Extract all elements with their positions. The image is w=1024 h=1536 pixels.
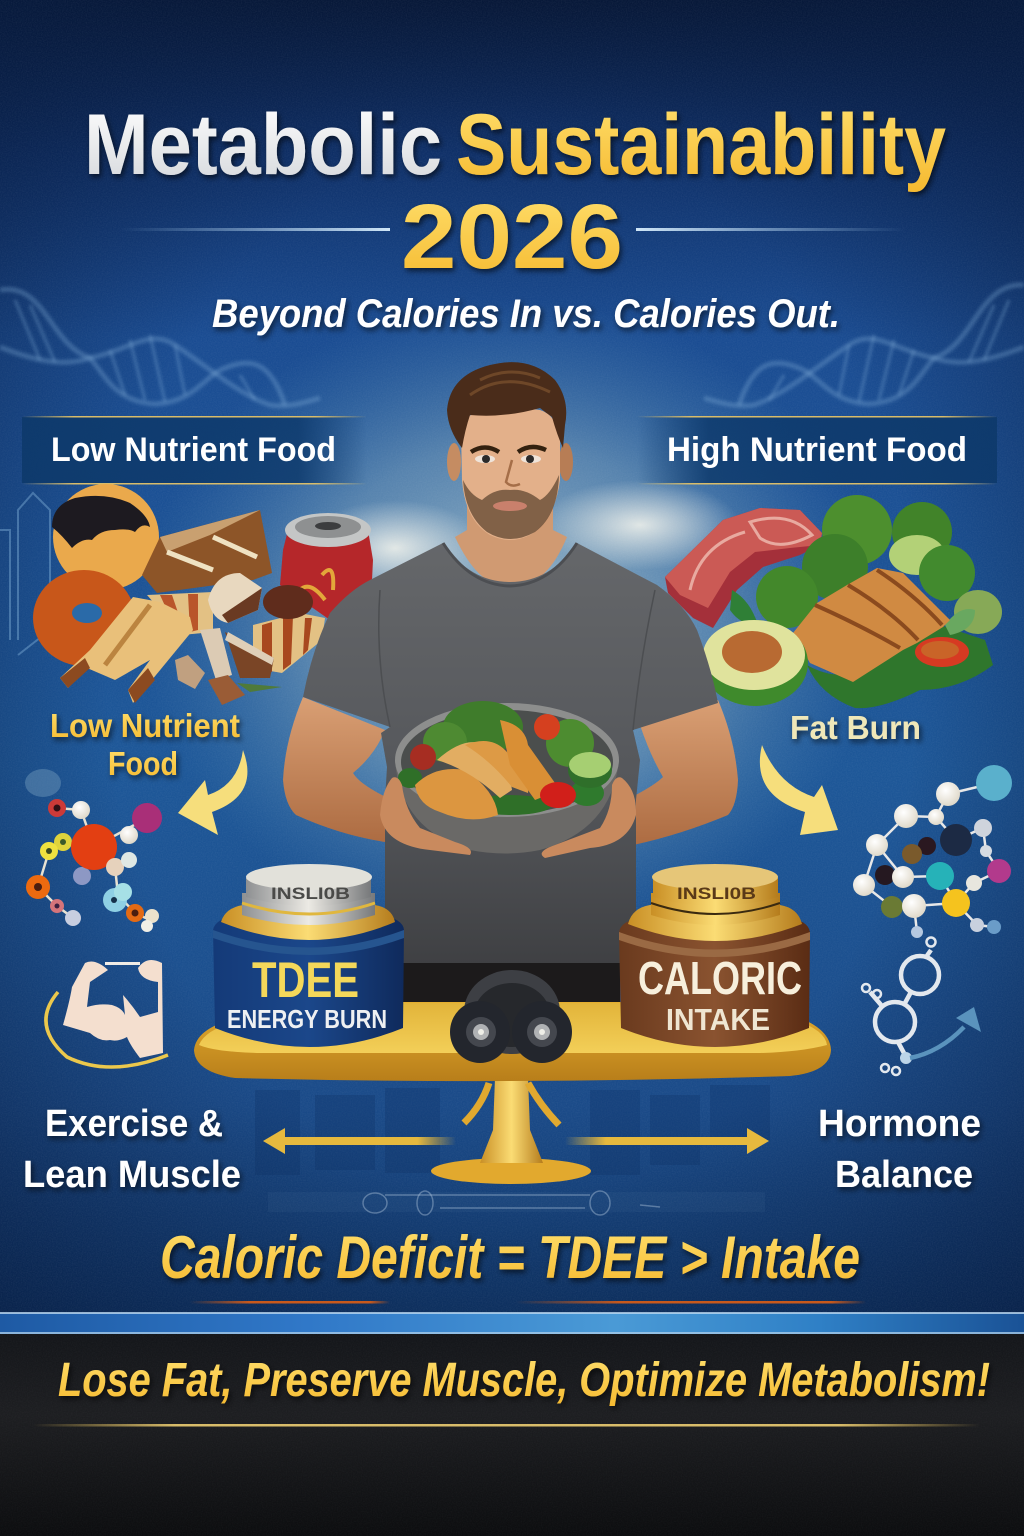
hair	[447, 362, 566, 448]
jar: caloric intake: INSLI0B	[677, 884, 756, 903]
chocolate pieces	[200, 628, 232, 680]
grilled chicken	[793, 568, 950, 682]
person	[283, 362, 738, 1003]
tomato	[915, 637, 969, 667]
cucumber	[568, 752, 612, 788]
icon: molecule left	[25, 769, 162, 932]
neck	[455, 490, 567, 585]
eyes	[475, 455, 495, 463]
arrow left of stand	[263, 1128, 456, 1154]
label: hormone balance: Hormone	[818, 1103, 981, 1145]
leaf cluster	[730, 590, 758, 625]
beard	[463, 475, 559, 539]
nose	[506, 460, 520, 486]
beam	[194, 1002, 831, 1081]
title: Metabolic: Metabolic	[84, 97, 442, 193]
cream ball donut	[53, 484, 159, 590]
scroll line art	[268, 1191, 765, 1215]
tomatoes	[534, 714, 560, 740]
cake slice	[142, 510, 272, 593]
avocado	[702, 620, 808, 706]
decorative dna helix left	[0, 289, 320, 406]
formula underline left	[190, 1301, 390, 1304]
label: exercise and lean muscle	[23, 1103, 241, 1196]
stand foot	[431, 1158, 591, 1184]
label: low nutrient food	[50, 707, 240, 782]
icon: hormone symbol	[862, 938, 981, 1075]
shirt	[303, 543, 718, 965]
panel: high nutrient food header: High Nutrient Food	[667, 431, 967, 469]
footer band	[0, 1334, 1024, 1536]
title rule left	[120, 228, 390, 231]
scale	[194, 970, 831, 1184]
pepper	[540, 782, 576, 808]
decorative dna helix right	[704, 285, 1024, 406]
bowl	[395, 701, 619, 854]
arrow: left yellow	[178, 750, 247, 835]
steak	[665, 508, 822, 628]
label: hormone balance: Balance	[835, 1154, 973, 1196]
salad greens	[443, 701, 523, 753]
jar label energy burn: ENERGY BURN	[227, 1004, 387, 1034]
striped candy block right	[253, 613, 325, 673]
ears	[447, 443, 461, 481]
panel: low nutrient food header: Low Nutrient Food	[51, 431, 336, 469]
glazed donut	[33, 570, 135, 666]
jar: tdee energy burn	[213, 864, 404, 1047]
image: low nutrient foods	[33, 484, 373, 705]
title	[84, 97, 946, 288]
title: 2026: 2026	[401, 186, 623, 288]
avocado ball	[546, 719, 594, 767]
right arm	[632, 700, 738, 845]
arrow right of stand	[565, 1128, 769, 1154]
jar label tdee: TDEE	[252, 952, 359, 1008]
arrow: right yellow	[760, 745, 838, 835]
dumbbell	[450, 970, 572, 1063]
soda can	[280, 530, 373, 620]
icon: muscle arm	[46, 960, 168, 1067]
decorative building sketch	[0, 493, 50, 655]
label: exercise and lean muscle: Lean Muscle	[23, 1154, 241, 1196]
greens	[807, 625, 993, 708]
decorative city silhouette	[255, 1085, 770, 1175]
subtitle: Beyond Calories In vs. Calories Out.	[212, 292, 840, 336]
title: Sustainability: Sustainability	[456, 97, 946, 193]
title rule right	[636, 228, 906, 231]
left arm	[283, 697, 392, 842]
chocolate ball	[263, 585, 313, 619]
jar label intake: INTAKE	[666, 1002, 770, 1037]
image: high nutrient foods	[665, 495, 1002, 708]
right hand	[542, 777, 636, 858]
jar: caloric intake	[619, 864, 810, 1047]
label: hormone balance	[818, 1103, 981, 1196]
face	[461, 408, 560, 540]
shorts waistband	[403, 963, 620, 1003]
icon: molecule right	[853, 765, 1012, 938]
panel: low nutrient food header	[22, 416, 367, 484]
label: low nutrient food: Low Nutrient	[50, 707, 240, 744]
label: exercise and lean muscle: Exercise &	[45, 1103, 223, 1145]
stand post	[480, 1078, 543, 1163]
formula underline right	[516, 1301, 866, 1304]
label: fat burn: Fat Burn	[790, 709, 921, 746]
formula: Caloric Deficit = TDEE > Intake	[160, 1224, 860, 1291]
striped candy block left	[147, 592, 213, 635]
pastry bar	[60, 597, 193, 703]
cream block	[208, 573, 262, 623]
left hand	[380, 777, 471, 855]
blue divider band	[0, 1312, 1024, 1334]
panel: high nutrient food header	[637, 416, 997, 484]
broccoli	[822, 495, 892, 565]
chicken pieces	[415, 769, 498, 819]
label: low nutrient food: Food	[108, 745, 178, 782]
jar label caloric: CALORIC	[638, 952, 802, 1004]
jar: tdee energy burn: INSLI0B	[271, 884, 350, 903]
